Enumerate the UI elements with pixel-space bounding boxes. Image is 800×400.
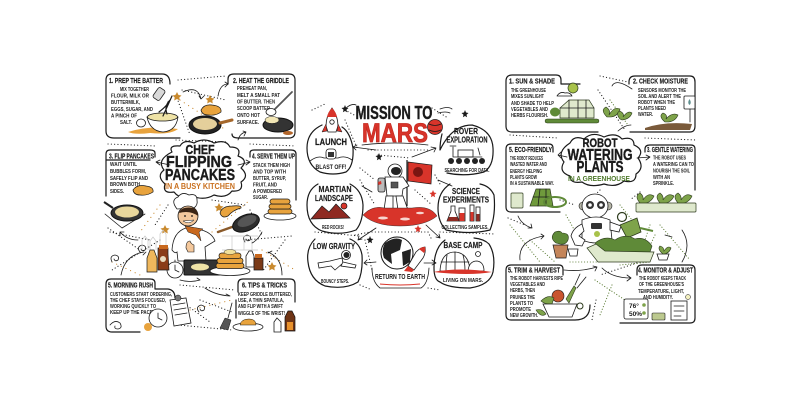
box 5: eco-friendly: WASTED WATER AND xyxy=(510,162,547,168)
box: trim and harvest: PLANTS TO xyxy=(510,301,533,307)
box 1: sun and shade: AND SHADE TO HELP xyxy=(511,101,554,107)
title cloud: PANCAKES xyxy=(165,167,235,184)
box 4: serve them up: AND TOP WITH xyxy=(253,170,286,176)
box 5: morning rush: WORKING QUICKLY TO xyxy=(110,304,156,310)
icon: beakers xyxy=(447,205,480,221)
section: launch: BLAST OFF! xyxy=(316,164,346,171)
box 2: heat the griddle: PREHEAT PAN, xyxy=(237,86,267,92)
section: return to earth xyxy=(372,237,429,288)
icon: earth xyxy=(381,237,413,269)
icon: monitoring devices: 50% xyxy=(629,311,642,318)
box 3: gentle watering xyxy=(636,145,696,212)
box: trim and harvest: PROMOTE xyxy=(510,307,531,313)
icon: spatula, plate and shakers xyxy=(220,303,295,332)
icon: seedling tray xyxy=(636,193,696,212)
box 4: monitor and adjust: AND HUMIDITY. xyxy=(643,295,673,301)
box 2: check moisture xyxy=(629,76,695,132)
box 5: eco-friendly: IN A SUSTAINABLE WAY. xyxy=(510,181,554,187)
title: mission to mars xyxy=(346,103,452,148)
icon: returning rocket xyxy=(404,247,425,272)
title cloud: WATERING xyxy=(568,147,632,164)
box 1: prep the batter xyxy=(106,74,180,138)
decorative dots xyxy=(312,104,495,290)
timer xyxy=(167,260,183,278)
box 3: gentle watering: NOURISH THE SOIL xyxy=(653,168,691,174)
section: low gravity xyxy=(308,239,362,287)
section: martian landscape: MARTIAN xyxy=(318,184,352,194)
icon: moisture sensor and soil xyxy=(645,96,695,130)
box 3: flip pancakes: BUBBLES FORM, xyxy=(110,169,146,175)
mars ground xyxy=(363,207,437,226)
box 4: serve them up: STACK THEM HIGH xyxy=(253,163,290,169)
box 6: tips and tricks: KEEP GRIDDLE BUTTERED, xyxy=(238,292,292,298)
title: mission to mars: MARS xyxy=(362,118,428,148)
box 4: monitor and adjust: OF THE GREENHOUSE'S xyxy=(639,282,684,288)
box 6: tips and tricks: USE, A THIN SPATULA, xyxy=(238,298,284,304)
box: trim and harvest: NEW GROWTH. xyxy=(510,313,538,319)
box: trim and harvest xyxy=(506,265,590,320)
box 2: check moisture: SOIL AND ALERT THE xyxy=(638,94,681,100)
section: science experiments: EXPERIMENTS xyxy=(443,194,489,204)
process arrows xyxy=(120,131,282,296)
box 2: heat the griddle xyxy=(228,74,295,138)
icon: pancake and pan xyxy=(172,82,232,134)
box 1: sun and shade: VEGETABLES AND xyxy=(511,107,548,113)
box 6: tips and tricks: AND FLIP WITH A SWIFT xyxy=(238,304,284,310)
box: trim and harvest: HERBS, THEN xyxy=(510,288,535,294)
box 1: prep the batter: 1. PREP THE BATTER xyxy=(109,78,163,85)
box 3: gentle watering: WITH AN xyxy=(653,175,670,181)
section: launch: LAUNCH xyxy=(315,137,347,148)
shakers xyxy=(246,251,263,270)
title: mission to mars: MISSION TO xyxy=(356,103,432,123)
icon: red mountains xyxy=(311,203,350,219)
potted plants xyxy=(552,231,671,260)
box 1: prep the batter: FLOUR, MILK OR xyxy=(111,94,149,100)
box 4: monitor and adjust: 4. MONITOR & ADJUST xyxy=(638,268,694,274)
title cloud: IN A GREENHOUSE xyxy=(568,174,630,183)
planter tray xyxy=(587,236,654,262)
box 4: monitor and adjust: TEMPERATURE, LIGHT, xyxy=(638,289,684,295)
pancake stack on plate xyxy=(210,250,250,276)
syrup bottles xyxy=(147,245,169,272)
box 2: check moisture: 2. CHECK MOISTURE xyxy=(633,78,688,86)
box 4: serve them up: FRUIT, AND xyxy=(253,182,277,188)
icon: griddle with pancake xyxy=(104,186,153,228)
box 2: check moisture: ROBOT WHEN THE xyxy=(638,100,675,106)
section: rover exploration: SEARCHING FOR DATA. xyxy=(444,168,490,174)
box 1: prep the batter: SALT. xyxy=(120,120,132,126)
box 5: eco-friendly: ENERGY HELPING xyxy=(510,169,542,175)
section: science experiments xyxy=(438,184,494,232)
box 5: eco-friendly: 5. ECO-FRIENDLY xyxy=(509,147,552,154)
chef jacket xyxy=(172,228,215,261)
box: trim and harvest: 5. TRIM & HARVEST xyxy=(508,268,561,274)
icon: rocket xyxy=(322,108,342,132)
box 3: gentle watering: THE ROBOT USES xyxy=(653,156,686,162)
box 6: tips and tricks xyxy=(220,279,295,332)
icon: clipboard and clock xyxy=(144,295,191,331)
icon: dome habitat xyxy=(433,252,492,274)
decorative stars xyxy=(342,105,468,243)
robot illustration xyxy=(552,194,671,262)
neckerchief xyxy=(185,226,203,241)
icon: monitoring devices: 76° xyxy=(629,302,639,310)
box 5: morning rush: 5. MORNING RUSH xyxy=(108,282,153,290)
box 4: serve them up: SUGAR. xyxy=(253,195,268,201)
box 3: flip pancakes: WAIT UNTIL xyxy=(110,162,138,168)
box 2: check moisture: SENSORS MONITOR THE xyxy=(638,88,686,94)
box 2: heat the griddle: OF BUTTER. THEN xyxy=(237,100,275,106)
icon: floating astronaut xyxy=(318,250,356,270)
box 4: serve them up xyxy=(250,150,296,220)
box 5: eco-friendly: PLANTS GROW xyxy=(510,175,538,181)
flying pancake xyxy=(220,206,241,217)
box 3: flip pancakes: SAFELY FLIP AND xyxy=(110,176,148,182)
section: base camp xyxy=(433,238,494,288)
flag xyxy=(407,160,432,206)
title cloud: IN A BUSY KITCHEN xyxy=(165,182,235,191)
robot body xyxy=(571,217,621,246)
title cloud: FLIPPING xyxy=(166,154,232,171)
box: trim and harvest: PRUNES THE xyxy=(510,295,535,301)
icon: mixing bowl with whisk xyxy=(128,87,178,134)
section: base camp: LIVING ON MARS. xyxy=(443,278,483,284)
box 4: monitor and adjust: THE ROBOT KEEPS TRACK xyxy=(639,276,686,282)
robot arrows xyxy=(518,83,687,281)
box 5: morning rush: CUSTOMERS START ORDERING, xyxy=(110,292,172,298)
section: low gravity: LOW GRAVITY xyxy=(313,242,355,251)
box 1: prep the batter: EGGS, SUGAR, AND xyxy=(111,107,153,113)
section: science experiments: COLLECTING SAMPLES. xyxy=(442,225,489,231)
section: rover exploration xyxy=(440,125,493,175)
title cloud: ROBOT xyxy=(582,136,618,150)
box 2: heat the griddle: SCOOP BATTER xyxy=(237,106,270,112)
robot head xyxy=(579,194,612,218)
section: martian landscape: RED ROCKS! xyxy=(322,225,344,231)
icon: solar panel, bin and hose xyxy=(511,189,566,208)
thumbs-up hand xyxy=(186,241,194,252)
icon: seedlings xyxy=(603,107,632,120)
box 2: heat the griddle: 2. HEAT THE GRIDDLE xyxy=(233,78,289,85)
box 3: flip pancakes: BROWN BOTH xyxy=(110,182,140,188)
section: low gravity: BOUNCY STEPS. xyxy=(321,279,349,285)
box 1: sun and shade: 1. SUN & SHADE xyxy=(509,78,555,86)
box 1: prep the batter: MIX TOGETHER xyxy=(120,87,149,93)
box 3: flip pancakes: SIDES. xyxy=(110,189,124,195)
box 4: serve them up: 4. SERVE THEM UP xyxy=(252,154,295,160)
title cloud: CHEF xyxy=(186,142,215,157)
box 6: tips and tricks: WIGGLE OF THE WRIST! xyxy=(238,311,285,317)
chef hat and head xyxy=(174,193,198,226)
icon: rover xyxy=(448,146,485,164)
box 2: check moisture: WATER. xyxy=(638,112,653,118)
section: return to earth: RETURN TO EARTH xyxy=(375,274,425,281)
box 5: morning rush: KEEP UP THE PACE. xyxy=(110,310,154,316)
box 3: gentle watering: 3. GENTLE WATERING xyxy=(647,147,693,154)
icon: basket, tomato and shears xyxy=(536,274,586,317)
box 2: heat the griddle: MELT A SMALL PAT xyxy=(237,93,281,99)
box 1: sun and shade xyxy=(506,75,632,132)
box 5: morning rush: THE CHEF STAYS FOCUSED, xyxy=(110,298,166,304)
box 6: tips and tricks: 6. TIPS & TRICKS xyxy=(242,282,287,290)
title cloud: PLANTS xyxy=(576,159,624,176)
decorative dots xyxy=(108,76,296,330)
chef illustration xyxy=(142,193,263,278)
mars arrows xyxy=(353,145,452,265)
box 4: serve them up: A POWDERED xyxy=(253,189,282,195)
box: trim and harvest: THE ROBOT HARVESTS RIPE xyxy=(510,276,563,282)
box 1: sun and shade: MIXES SUNLIGHT xyxy=(511,94,545,100)
icon: sun and greenhouse xyxy=(545,83,599,123)
icon: monitoring devices xyxy=(624,294,690,320)
box 3: gentle watering: SPRINKLE. xyxy=(653,181,674,187)
box 3: flip pancakes xyxy=(104,150,155,228)
box 5: eco-friendly xyxy=(506,144,566,212)
box 2: check moisture: PLANTS NEED xyxy=(638,106,666,112)
box 1: sun and shade: THE GREENHOUSE xyxy=(511,88,546,94)
section: rover exploration: EXPLORATION xyxy=(446,134,488,144)
box 1: sun and shade: HERBS FLOURISH. xyxy=(511,113,548,119)
section: martian landscape xyxy=(307,184,363,233)
box 5: morning rush xyxy=(106,279,191,332)
box 4: serve them up: BUTTER, SYRUP, xyxy=(253,176,286,182)
icon: griddle and spoon xyxy=(263,92,293,135)
box 4: monitor and adjust xyxy=(620,265,695,323)
kitchen shelves and bottles xyxy=(142,230,258,250)
box 1: prep the batter: BUTTERMILK, xyxy=(111,100,140,106)
box 3: gentle watering: A WATERING CAN TO xyxy=(653,162,694,168)
section: rover exploration: ROVER xyxy=(454,126,478,136)
icon: served pancake stack xyxy=(264,199,296,220)
box 1: prep the batter: A PINCH OF xyxy=(111,114,138,120)
griddle on counter xyxy=(184,260,220,275)
box 5: eco-friendly: THE ROBOT REDUCES xyxy=(510,156,543,162)
panel: chef flipping pancakes xyxy=(104,74,296,332)
astronaut xyxy=(378,164,409,210)
icon: launch pad xyxy=(310,149,352,161)
section: science experiments: SCIENCE xyxy=(452,186,480,196)
title cloud xyxy=(561,134,641,186)
section: martian landscape: LANDSCAPE xyxy=(315,193,353,203)
section: base camp: BASE CAMP xyxy=(444,241,483,250)
section: launch xyxy=(307,108,353,174)
watering can xyxy=(618,212,653,238)
icon: red planet xyxy=(428,120,442,134)
box 2: heat the griddle: SURFACE. xyxy=(237,120,259,126)
flipping pan xyxy=(218,210,262,236)
decorative dots xyxy=(508,76,695,320)
panel: robot watering plants xyxy=(506,75,696,323)
box 2: heat the griddle: ONTO HOT xyxy=(237,113,261,119)
title cloud xyxy=(160,140,246,198)
box 3: flip pancakes: 3. FLIP PANCAKES xyxy=(109,154,154,160)
panel: mission to mars xyxy=(307,103,495,290)
astronaut with flag xyxy=(363,160,437,226)
box: trim and harvest: VEGETABLES AND xyxy=(510,282,545,288)
